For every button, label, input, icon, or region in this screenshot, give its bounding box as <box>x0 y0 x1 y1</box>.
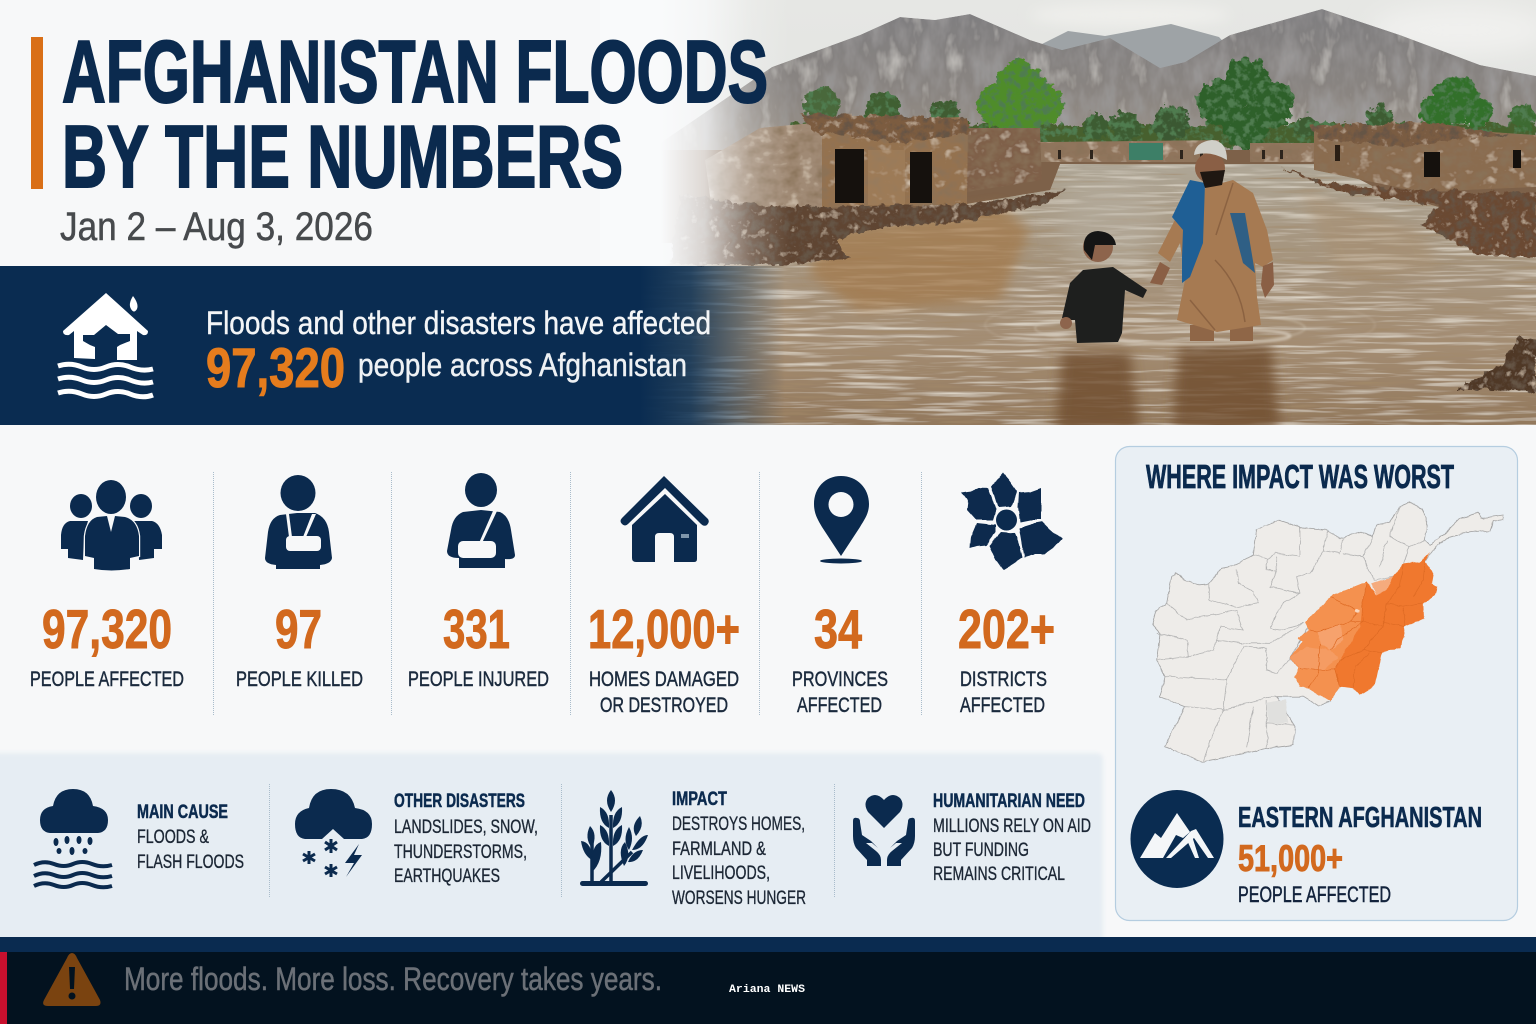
context: humanitarian need: REMAINS CRITICAL <box>933 864 1065 885</box>
icon: person with sling <box>265 475 332 569</box>
stat: districts affected: 202+ <box>958 598 1055 660</box>
footer band <box>0 937 1536 1024</box>
context: other disasters: THUNDERSTORMS, <box>394 842 527 863</box>
icon: heart in hands <box>853 795 915 866</box>
distant houses <box>1040 140 1314 162</box>
icon: warning triangle <box>43 953 100 1006</box>
stat: homes damaged: OR DESTROYED <box>600 694 728 717</box>
icon: district petals <box>962 473 1062 570</box>
icon: flooded house <box>56 293 155 397</box>
title accent bar <box>31 37 43 189</box>
context: other disasters: EARTHQUAKES <box>394 866 500 887</box>
small trees band <box>790 87 1536 148</box>
stat: people affected: 97,320 <box>42 598 172 660</box>
ground behind houses <box>650 150 1536 243</box>
icon: rain cloud and waves <box>34 789 112 887</box>
region stats: PEOPLE AFFECTED <box>1238 882 1391 907</box>
icon: person with arm sling <box>447 473 515 568</box>
watermark: Ariana NEWS <box>729 984 805 996</box>
man <box>1150 140 1274 341</box>
context: other disasters: OTHER DISASTERS <box>394 791 525 812</box>
icon: snow storm cloud <box>295 789 372 877</box>
context: impact: DESTROYS HOMES, <box>672 814 805 835</box>
icon: map pin <box>814 476 869 564</box>
stat: provinces affected: PROVINCES <box>792 668 888 691</box>
context: humanitarian need: MILLIONS RELY ON AID <box>933 816 1091 837</box>
stat: provinces affected <box>792 476 888 717</box>
stat: people killed: PEOPLE KILLED <box>236 668 363 691</box>
context: main cause <box>34 789 244 887</box>
stat: provinces affected: 34 <box>814 598 862 660</box>
photo fade: white top <box>640 0 783 266</box>
rubble right <box>1280 168 1536 257</box>
rubble left <box>670 190 1068 264</box>
stat: districts affected <box>958 473 1062 717</box>
title: BY THE NUMBERS <box>62 107 623 206</box>
banner text: 97,320 <box>206 336 345 399</box>
panel: where impact was worst <box>1116 446 1518 920</box>
context: impact: IMPACT <box>672 789 727 810</box>
stat: homes damaged <box>588 476 740 717</box>
icon: mountain badge <box>1130 790 1224 888</box>
stat: people injured <box>408 473 549 691</box>
mud houses left <box>706 112 1041 208</box>
context: impact <box>580 789 806 909</box>
context: main cause: FLASH FLOODS <box>137 852 244 873</box>
stat: homes damaged: 12,000+ <box>588 598 740 660</box>
context: other disasters <box>295 789 538 887</box>
banner: navy band <box>0 266 785 425</box>
banner text: people across Afghanistan <box>358 347 687 383</box>
stat: people injured: PEOPLE INJURED <box>408 668 549 691</box>
mud houses right <box>1310 122 1536 192</box>
stat: people killed <box>236 475 363 691</box>
context: main cause: MAIN CAUSE <box>137 802 228 823</box>
context: impact: WORSENS HUNGER <box>672 888 806 909</box>
water <box>640 164 1536 425</box>
banner text <box>206 305 711 399</box>
date range: Jan 2 – Aug 3, 2026 <box>60 205 373 249</box>
context: main cause: FLOODS & <box>137 827 209 848</box>
context: humanitarian need: HUMANITARIAN NEED <box>933 791 1085 812</box>
stat: people killed: 97 <box>275 598 322 660</box>
map of Afghanistan <box>1153 502 1503 762</box>
child <box>1060 231 1147 343</box>
hero photo: flooded village with man and child <box>600 0 1536 430</box>
context: impact: FARMLAND & <box>672 839 766 860</box>
banner text: Floods and other disasters have affected <box>206 305 711 341</box>
context: other disasters: LANDSLIDES, SNOW, <box>394 817 538 838</box>
title <box>62 22 768 206</box>
stat: people affected: PEOPLE AFFECTED <box>30 668 184 691</box>
context: humanitarian need: BUT FUNDING <box>933 840 1029 861</box>
stat: people affected <box>30 480 184 691</box>
icon: people group <box>61 480 162 570</box>
icon: crop plant <box>580 790 648 886</box>
icon: house <box>620 476 709 562</box>
title: AFGHANISTAN FLOODS <box>62 22 768 121</box>
ripples around figures <box>1034 296 1374 356</box>
footer message: More floods. More loss. Recovery takes years. <box>124 961 662 997</box>
water colour patches <box>810 180 1440 430</box>
stat: homes damaged: HOMES DAMAGED <box>589 668 739 691</box>
context: humanitarian need <box>853 791 1091 885</box>
panel: context strip <box>0 753 1103 943</box>
stat: districts affected: DISTRICTS <box>960 668 1047 691</box>
region stats <box>1238 802 1482 907</box>
context: impact: LIVELIHOODS, <box>672 863 770 884</box>
region stats: 51,000+ <box>1238 838 1343 879</box>
stat dividers <box>214 472 922 715</box>
large trees <box>976 56 1494 150</box>
stat: people injured: 331 <box>443 598 510 660</box>
stat: provinces affected: AFFECTED <box>797 694 882 717</box>
stat: districts affected: AFFECTED <box>960 694 1045 717</box>
